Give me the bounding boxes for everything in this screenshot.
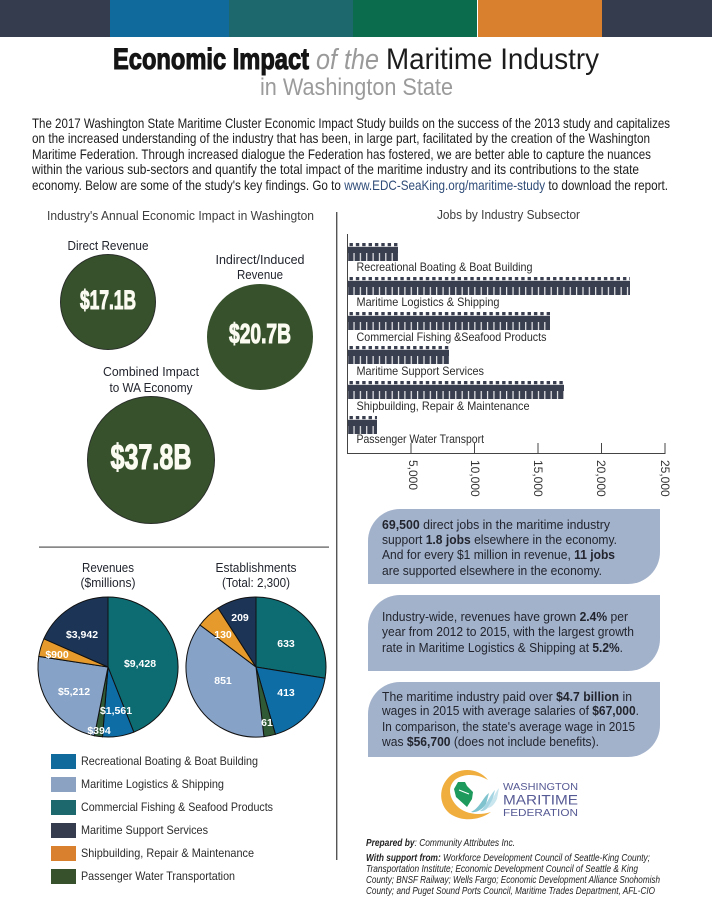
- pie chart: establishments: [186, 560, 326, 737]
- pie chart: establishments: (Total: 2,300): [222, 575, 290, 590]
- title: Maritime Industry: [386, 43, 599, 76]
- pie chart: revenues: $900: [45, 649, 69, 661]
- bubble: combined impact: $37.8B: [110, 438, 192, 477]
- bar: commercial fishing: Commercial Fishing &Seafood Products: [356, 330, 546, 344]
- credits: Prepared by: Community Attributes Inc.: [366, 838, 515, 849]
- callout: revenue growth: [368, 595, 660, 671]
- callout: revenue growth: rate in Maritime Logistics & Shipping at 5.2%.: [382, 640, 623, 655]
- pie chart: establishments: Establishments: [216, 560, 297, 575]
- bar: shipbuilding: Shipbuilding, Repair & Maintenance: [356, 399, 530, 413]
- bubble: indirect revenue: Indirect/Induced: [216, 252, 304, 267]
- pie chart: revenues: $3,942: [66, 629, 98, 641]
- bubble: indirect revenue: Revenue: [237, 267, 283, 282]
- subtitle: in Washington State: [260, 74, 453, 101]
- callout: jobs: support 1.8 jobs elsewhere in the economy.: [382, 532, 617, 547]
- callout: wages: wages in 2015 with average salaries of $67,000.: [381, 703, 639, 718]
- pie chart: establishments: 633: [277, 638, 295, 650]
- chart axes: 10,000: [468, 460, 482, 497]
- bubble: direct revenue: Direct Revenue: [68, 238, 148, 253]
- legend: Passenger Water Transportation: [81, 869, 235, 883]
- credits: [366, 838, 660, 897]
- callout: jobs: [368, 509, 660, 584]
- bar: passenger water transport: [348, 416, 485, 446]
- bar: recreational boating: [348, 243, 532, 274]
- bubble: direct revenue: $17.1B: [80, 285, 136, 315]
- logo: Washington Maritime Federation: FEDERATION: [503, 807, 578, 819]
- title: of the: [316, 44, 379, 76]
- bubble: indirect revenue: [207, 252, 313, 390]
- pie chart: establishments: 851: [214, 675, 232, 687]
- legend: Commercial Fishing & Seafood Products: [81, 800, 273, 814]
- chart axes: 5,000: [406, 460, 420, 490]
- bubble: combined impact: [88, 364, 214, 524]
- pie chart: establishments: 413: [277, 687, 295, 699]
- legend: Recreational Boating & Boat Building: [81, 754, 258, 768]
- chart axes: [348, 234, 672, 497]
- pie chart: revenues: $9,428: [124, 658, 156, 670]
- credits: With support from: Workforce Development Council of Seattle-King County;: [366, 853, 650, 864]
- heading: jobs by subsector: Jobs by Industry Subsector: [437, 207, 581, 222]
- callout: revenue growth: Industry-wide, revenues have grown 2.4% per: [382, 609, 629, 624]
- bar: recreational boating: Recreational Boating & Boat Building: [356, 260, 532, 274]
- callout: wages: [368, 682, 660, 757]
- heading: annual economic impact: Industry's Annual Economic Impact in Washington: [47, 208, 314, 223]
- credits: County; and Puget Sound Ports Council, Maritime Trades Department, AFL-CIO: [366, 886, 655, 897]
- intro text block: within the various sub-sectors and quantify the total impact of the maritime industry and its contributions to the state: [31, 162, 639, 177]
- pie chart: revenues: $1,561: [100, 705, 132, 717]
- logo: Washington Maritime Federation: MARITIME: [503, 792, 578, 808]
- top colour band: [0, 0, 712, 37]
- callout: jobs: And for every $1 million in revenue, 11 jobs: [382, 547, 615, 562]
- pictogram bar chart: jobs: [348, 234, 672, 497]
- pie chart: revenues: [38, 560, 178, 737]
- legend: Maritime Support Services: [81, 823, 208, 837]
- logo: Washington Maritime Federation: WASHINGTON: [503, 782, 578, 793]
- callout: revenue growth: year from 2012 to 2015, with the largest growth: [382, 624, 634, 639]
- pie chart: establishments: 61: [261, 717, 273, 729]
- bubble: direct revenue: [60, 238, 156, 350]
- pie chart: revenues: Revenues: [82, 560, 134, 575]
- pie chart: establishments: 209: [231, 612, 249, 624]
- legend: Shipbuilding, Repair & Maintenance: [81, 846, 254, 860]
- bubble: indirect revenue: $20.7B: [229, 318, 291, 349]
- callout: wages: was $56,700 (does not include benefits).: [381, 734, 599, 749]
- intro text block: [31, 116, 670, 193]
- chart axes: 15,000: [531, 460, 545, 497]
- bar: maritime logistics: [348, 277, 630, 309]
- pie chart: establishments: 130: [214, 629, 232, 641]
- pie chart: revenues: $394: [87, 725, 111, 737]
- bar: maritime logistics: Maritime Logistics & Shipping: [356, 295, 500, 309]
- logo: Washington Maritime Federation: [441, 770, 578, 819]
- legend: [51, 754, 273, 884]
- bar: maritime support: [348, 346, 484, 378]
- title: Economic Impact: [113, 43, 309, 76]
- bubble: combined impact: Combined Impact: [103, 364, 199, 379]
- vertical divider: [336, 212, 337, 860]
- callout: wages: The maritime industry paid over $4.7 billion in: [382, 689, 632, 704]
- intro text block: economy. Below are some of the study's key findings. Go to www.EDC-SeaKing.org/maritime-study to download the report.: [32, 178, 668, 193]
- chart axes: 25,000: [658, 460, 672, 497]
- pie chart: revenues: ($millions): [80, 575, 136, 590]
- title: [113, 43, 599, 76]
- callout: jobs: 69,500 direct jobs in the maritime industry: [382, 517, 610, 532]
- callout: wages: In comparison, the state's average wage in 2015: [382, 719, 635, 734]
- icon: crescent, ship and waves: [441, 770, 499, 819]
- credits: Transportation Institute; Economic Development Council of Seattle & King: [366, 864, 638, 875]
- pie chart: revenues: $5,212: [58, 686, 90, 698]
- chart axes: 20,000: [594, 460, 608, 497]
- bar: commercial fishing: [348, 312, 550, 344]
- bar: passenger water transport: Passenger Water Transport: [356, 432, 485, 446]
- legend: Maritime Logistics & Shipping: [81, 777, 224, 791]
- bar: maritime support: Maritime Support Services: [356, 364, 484, 378]
- bubble: combined impact: to WA Economy: [110, 380, 193, 395]
- bar: shipbuilding: [348, 381, 564, 413]
- callout: jobs: are supported elsewhere in the economy.: [382, 563, 602, 578]
